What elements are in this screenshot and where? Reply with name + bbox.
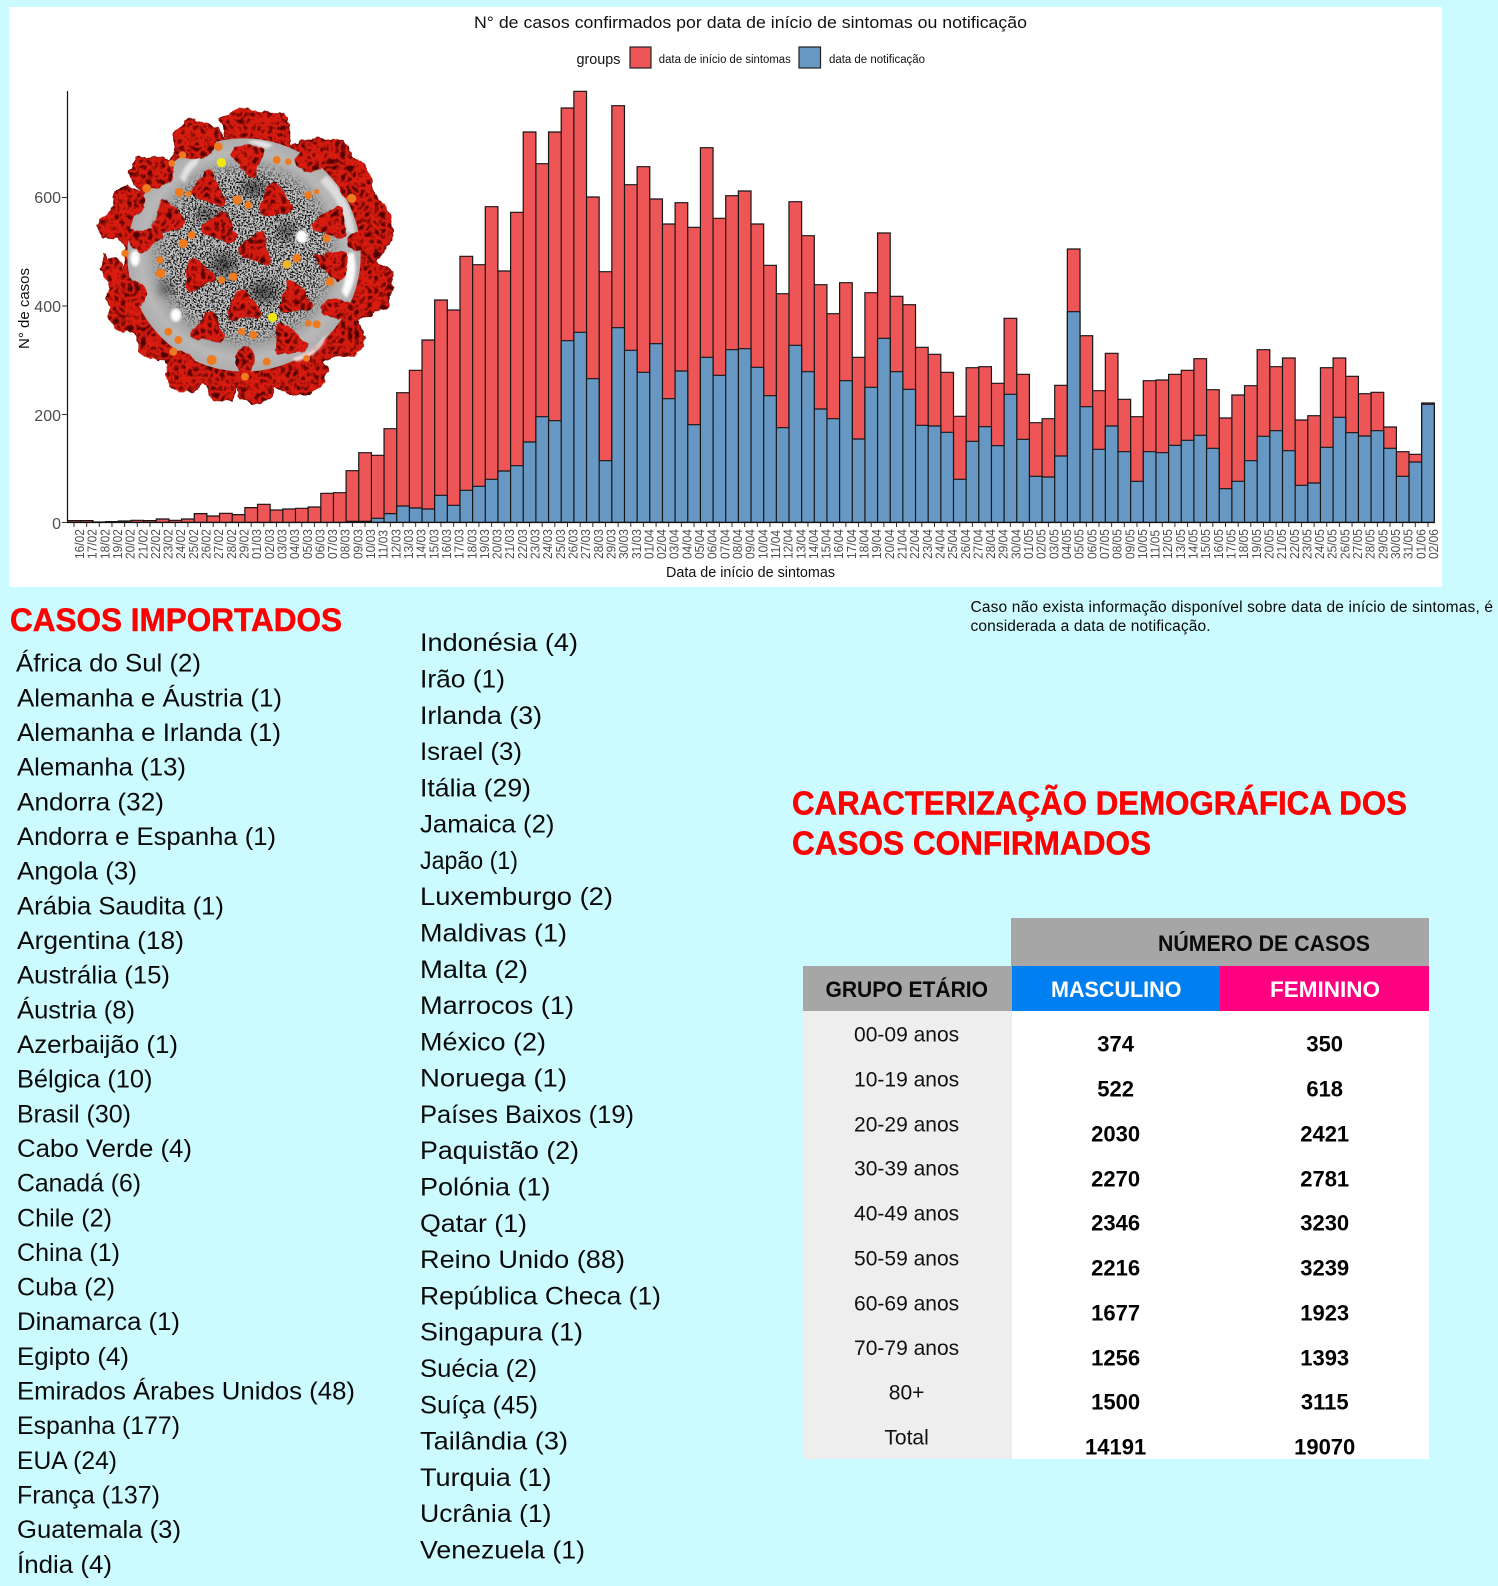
x axis date labels: 18/04 <box>857 529 872 559</box>
female case counts: 3239 <box>1300 1256 1349 1281</box>
female case counts <box>1294 1032 1355 1460</box>
x axis date labels: 02/05 <box>1034 529 1049 559</box>
x axis date labels: 23/03 <box>528 529 543 559</box>
x axis date labels: 29/05 <box>1376 529 1391 559</box>
chart title: N° de casos confirmados por data de início de sintomas ou notificação <box>474 13 1027 32</box>
header: feminino <box>1220 966 1429 1011</box>
country list: column 2: Polónia (1) <box>420 1174 550 1202</box>
age group labels: Total <box>884 1426 929 1449</box>
country list: column 1: Alemanha (13) <box>17 754 186 782</box>
bars: data de início de sintomas <box>68 91 1434 522</box>
heading: caracterização demográfica: CASOS CONFIRMADOS <box>792 824 1151 862</box>
stacked bar chart <box>62 91 1435 525</box>
x axis date labels: 10/05 <box>1135 529 1150 559</box>
x axis date labels: 31/03 <box>629 529 644 559</box>
country list: column 1: Cabo Verde (4) <box>17 1135 192 1163</box>
x axis date labels: 08/05 <box>1110 529 1125 559</box>
x axis date labels: 30/04 <box>1009 529 1024 559</box>
female case counts: 1923 <box>1300 1301 1349 1326</box>
x axis date labels: 09/04 <box>743 529 758 559</box>
country list: column 1: África do Sul (2) <box>16 649 201 678</box>
country list: column 2: Tailândia (3) <box>420 1428 568 1456</box>
male case counts: 374 <box>1097 1032 1135 1057</box>
note: considerada a data de notificação. <box>970 618 1210 635</box>
male case counts: 1677 <box>1091 1301 1140 1326</box>
x axis date labels: 08/03 <box>338 529 353 559</box>
x axis date labels: 17/04 <box>844 529 859 559</box>
x axis date labels: 14/04 <box>806 529 821 559</box>
x axis date labels: 04/04 <box>680 529 695 559</box>
x axis date labels: 22/04 <box>908 529 922 559</box>
age group labels: 80+ <box>889 1381 924 1404</box>
x axis date labels: 09/03 <box>351 529 366 559</box>
x axis date labels: 14/05 <box>1186 529 1201 559</box>
x axis date labels: 28/02 <box>224 529 239 559</box>
country list: column 2: Japão (1) <box>420 847 518 875</box>
x axis date labels: 26/04 <box>958 529 973 559</box>
x axis date labels: 13/05 <box>1173 529 1188 559</box>
country list: column 2: Maldivas (1) <box>420 920 567 948</box>
country list: column 1: Cuba (2) <box>17 1274 115 1302</box>
x axis date labels: 26/02 <box>199 529 214 559</box>
age group labels: 50-59 anos <box>854 1248 959 1271</box>
male case counts: 2346 <box>1091 1211 1140 1236</box>
female case counts: 19070 <box>1294 1435 1355 1460</box>
heading: caracterização demográfica: CARACTERIZAÇÃO DEMOGRÁFICA DOS <box>792 784 1407 822</box>
x axis date labels: 06/05 <box>1085 529 1099 559</box>
male case counts: 14191 <box>1085 1435 1146 1460</box>
female case counts: 1393 <box>1300 1345 1349 1370</box>
x axis date labels: 30/05 <box>1389 529 1403 559</box>
x axis date labels: 29/04 <box>996 529 1011 559</box>
country list: column 2: Malta (2) <box>420 956 528 984</box>
x axis date labels: 01/03 <box>250 529 264 559</box>
country list: column 1: Emirados Árabes Unidos (48) <box>17 1377 355 1406</box>
x axis date labels: 19/04 <box>870 529 884 559</box>
header: número de casos: NÚMERO DE CASOS <box>1158 931 1370 956</box>
y axis labels: 200 <box>34 408 61 425</box>
y axis title: N° de casos <box>17 268 33 349</box>
legend: data de notificação <box>829 54 925 66</box>
x axis date labels: 12/04 <box>781 529 796 559</box>
x axis date labels: 25/03 <box>553 529 568 559</box>
x axis date labels: 24/02 <box>174 529 188 559</box>
age group labels: 60-69 anos <box>854 1293 959 1316</box>
x axis date labels: 03/03 <box>275 529 290 559</box>
x axis date labels: 24/05 <box>1313 529 1327 559</box>
country list: column 1 <box>16 649 355 1579</box>
icon: coronavirus illustration <box>97 108 393 404</box>
x axis date labels: 23/02 <box>161 529 176 559</box>
x axis date labels: 30/03 <box>617 529 631 559</box>
country list: column 1: Dinamarca (1) <box>17 1308 180 1336</box>
x axis date labels: 22/03 <box>515 529 530 559</box>
x axis date labels: 31/05 <box>1401 529 1416 559</box>
country list: column 1: Áustria (8) <box>17 995 135 1024</box>
x axis date labels: 24/04 <box>933 529 948 559</box>
x axis date labels: 06/04 <box>705 529 720 559</box>
x axis date labels: 14/03 <box>414 529 429 559</box>
x axis date labels: 09/05 <box>1123 529 1137 559</box>
male case counts: 2216 <box>1091 1256 1140 1281</box>
male case counts: 522 <box>1097 1077 1134 1102</box>
x axis date labels: 21/02 <box>136 529 150 559</box>
legend <box>576 47 925 68</box>
male case counts: 2270 <box>1091 1167 1140 1192</box>
country list: column 2 <box>420 629 661 1564</box>
x axis date labels: 24/03 <box>541 529 555 559</box>
x axis date labels: 16/04 <box>832 529 846 559</box>
x axis date labels: 28/04 <box>984 529 998 559</box>
country list: column 1: Bélgica (10) <box>17 1066 152 1094</box>
header: grupo etário <box>803 966 1012 1011</box>
x axis date labels: 15/03 <box>427 529 441 559</box>
country list: column 2: Suíça (45) <box>420 1391 538 1419</box>
x axis date labels: 19/05 <box>1249 529 1264 559</box>
country list: column 1: Egipto (4) <box>17 1343 129 1371</box>
x axis date labels: 05/05 <box>1072 529 1087 559</box>
country list: column 2: Países Baixos (19) <box>420 1101 634 1129</box>
header: número de casos <box>1011 918 1429 966</box>
country list: column 1: Andorra e Espanha (1) <box>17 823 276 851</box>
x axis date labels: 03/04 <box>667 529 682 559</box>
x axis date labels: 05/03 <box>300 529 315 559</box>
x axis date labels: 15/04 <box>819 529 834 559</box>
x axis date labels: 16/03 <box>440 529 454 559</box>
panel: chart <box>9 7 1442 587</box>
country list: column 2: Paquistão (2) <box>420 1137 579 1165</box>
x axis date labels: 29/03 <box>604 529 619 559</box>
country list: column 2: México (2) <box>420 1028 546 1056</box>
country list: column 1: Guatemala (3) <box>17 1516 181 1544</box>
x axis date labels: 22/02 <box>148 529 163 559</box>
x axis date labels: 01/04 <box>642 529 657 559</box>
legend: groups <box>576 51 620 68</box>
x axis date labels: 07/05 <box>1098 529 1112 559</box>
country list: column 2: República Checa (1) <box>420 1282 661 1310</box>
x axis date labels: 19/03 <box>477 529 492 559</box>
x axis date labels: 27/04 <box>971 529 986 559</box>
x axis date labels: 28/05 <box>1363 529 1378 559</box>
x axis date labels: 28/03 <box>591 529 606 559</box>
y axis labels: 0 <box>52 516 61 533</box>
x axis date labels: 07/03 <box>326 529 340 559</box>
bars: data de notificação <box>346 312 1434 522</box>
heading: caracterização demográfica <box>792 784 1407 862</box>
x axis date labels: 02/06 <box>1427 529 1441 559</box>
female case counts: 3230 <box>1300 1211 1349 1236</box>
x axis date labels: 26/05 <box>1338 529 1353 559</box>
country list: column 2: Noruega (1) <box>420 1065 567 1093</box>
country list: column 1: Brasil (30) <box>17 1100 131 1128</box>
country list: column 1: EUA (24) <box>17 1447 117 1475</box>
x axis date labels: 17/03 <box>452 529 467 559</box>
country list: column 2: Itália (29) <box>420 774 531 802</box>
country list: column 2: Turquia (1) <box>420 1464 552 1492</box>
country list: column 2: Israel (3) <box>420 738 522 766</box>
country list: column 1: China (1) <box>17 1239 120 1267</box>
x axis date labels: 25/02 <box>186 529 201 559</box>
country list: column 2: Marrocos (1) <box>420 992 574 1020</box>
country list: column 1: Angola (3) <box>17 858 137 886</box>
country list: column 2: Indonésia (4) <box>420 629 578 657</box>
y axis labels: 600 <box>34 190 61 207</box>
country list: column 2: Venezuela (1) <box>420 1536 585 1564</box>
age group labels: 10-19 anos <box>854 1069 959 1092</box>
x axis date labels: 01/05 <box>1022 529 1036 559</box>
female case counts: 618 <box>1306 1077 1343 1102</box>
x axis date labels: 18/02 <box>98 529 112 559</box>
x axis date labels: 27/02 <box>212 529 226 559</box>
x axis date labels: 16/05 <box>1211 529 1226 559</box>
x axis date labels: 04/05 <box>1060 529 1074 559</box>
x axis date labels: 20/03 <box>490 529 505 559</box>
x axis date labels: 07/04 <box>718 529 733 559</box>
x axis date labels: 22/05 <box>1287 529 1302 559</box>
x axis date labels: 18/05 <box>1237 529 1251 559</box>
header: feminino: FEMININO <box>1270 977 1380 1002</box>
x axis date labels: 03/05 <box>1047 529 1062 559</box>
x axis date labels: 23/04 <box>920 529 935 559</box>
country list: column 1: Chile (2) <box>17 1204 112 1232</box>
header: grupo etário: GRUPO ETÁRIO <box>826 977 988 1002</box>
country list: column 2: Irão (1) <box>420 666 505 694</box>
country list: column 1: Índia (4) <box>17 1550 112 1579</box>
female case counts: 2421 <box>1300 1122 1349 1147</box>
x axis date labels: 26/03 <box>566 529 581 559</box>
male case counts <box>1085 1032 1146 1460</box>
x axis date labels: 04/03 <box>288 529 302 559</box>
male case counts: 1256 <box>1091 1345 1140 1370</box>
country list: column 1: Canadá (6) <box>17 1170 141 1198</box>
legend: data de início de sintomas <box>659 54 791 66</box>
x axis date labels: 20/04 <box>882 529 897 559</box>
x axis date labels: 21/04 <box>895 529 910 559</box>
x axis date labels: 15/05 <box>1199 529 1213 559</box>
age group labels <box>854 1024 959 1449</box>
x axis date labels: 23/05 <box>1300 529 1315 559</box>
panel: imported cases <box>10 602 661 1579</box>
x axis date labels: 08/04 <box>731 529 745 559</box>
y axis labels <box>34 190 61 533</box>
x axis date labels: 20/02 <box>123 529 138 559</box>
x axis date labels: 02/03 <box>262 529 277 559</box>
x axis date labels: 12/05 <box>1161 529 1175 559</box>
x axis date labels <box>73 529 1441 559</box>
x axis date labels: 21/03 <box>503 529 517 559</box>
x axis date labels: 11/03 <box>376 530 391 559</box>
country list: column 2: Singapura (1) <box>420 1319 583 1347</box>
country list: column 2: Luxemburgo (2) <box>420 883 613 911</box>
country list: column 2: Irlanda (3) <box>420 702 542 730</box>
demographic table <box>803 918 1429 1460</box>
x axis date labels: 27/03 <box>579 529 593 559</box>
age group labels: 40-49 anos <box>854 1203 959 1226</box>
x axis date labels: 05/04 <box>693 529 707 559</box>
country list: column 1: Arábia Saudita (1) <box>17 892 224 920</box>
x axis date labels: 29/02 <box>237 529 252 559</box>
age group labels: 20-29 anos <box>854 1114 959 1137</box>
x axis date labels: 01/06 <box>1414 529 1428 559</box>
country list: column 1: Argentina (18) <box>17 927 184 955</box>
x axis date labels: 10/04 <box>756 529 770 559</box>
x axis date labels: 18/03 <box>465 529 479 559</box>
country list: column 2: Suécia (2) <box>420 1355 537 1383</box>
female case counts: 3115 <box>1301 1390 1349 1415</box>
x axis date labels: 02/04 <box>655 529 669 559</box>
country list: column 1: França (137) <box>17 1482 160 1510</box>
country list: column 2: Ucrânia (1) <box>420 1500 552 1528</box>
age group labels: 30-39 anos <box>854 1158 959 1181</box>
country list: column 2: Reino Unido (88) <box>420 1246 625 1274</box>
note: Caso não exista informação disponível sobre data de início de sintomas, é <box>970 599 1493 616</box>
header: masculino <box>1012 966 1220 1011</box>
x axis date labels: 21/05 <box>1275 529 1289 559</box>
female case counts: 350 <box>1306 1032 1343 1057</box>
x axis date labels: 20/05 <box>1262 529 1277 559</box>
heading: casos importados: CASOS IMPORTADOS <box>10 602 342 638</box>
x axis date labels: 27/05 <box>1351 529 1365 559</box>
x axis date labels: 11/04 <box>769 530 783 559</box>
country list: column 2: Qatar (1) <box>420 1210 527 1238</box>
country list: column 1: Alemanha e Irlanda (1) <box>17 719 281 747</box>
male case counts: 2030 <box>1091 1122 1140 1147</box>
x axis date labels: 17/05 <box>1224 529 1239 559</box>
country list: column 1: Espanha (177) <box>17 1412 180 1440</box>
country list: column 2: Jamaica (2) <box>420 811 554 839</box>
x axis date labels: 17/02 <box>85 529 100 559</box>
note <box>970 599 1493 635</box>
country list: column 1: Alemanha e Áustria (1) <box>17 683 282 712</box>
age group labels: 00-09 anos <box>854 1024 959 1047</box>
x axis date labels: 16/02 <box>73 529 87 559</box>
x axis date labels: 13/04 <box>794 529 808 559</box>
x axis date labels: 25/04 <box>946 529 960 559</box>
header: masculino: MASCULINO <box>1051 977 1182 1002</box>
x axis date labels: 06/03 <box>313 529 328 559</box>
x axis date labels: 25/05 <box>1325 529 1340 559</box>
x axis date labels: 13/03 <box>402 529 416 559</box>
x axis date labels: 19/02 <box>111 529 125 559</box>
country list: column 1: Austrália (15) <box>17 962 170 990</box>
x axis title: Data de início de sintomas <box>666 564 835 581</box>
x axis date labels: 10/03 <box>364 529 378 559</box>
y axis labels: 400 <box>34 299 61 316</box>
country list: column 1: Andorra (32) <box>17 788 164 816</box>
country list: column 1: Azerbaijão (1) <box>17 1031 178 1059</box>
female case counts: 2781 <box>1300 1167 1349 1192</box>
x axis date labels: 11/05 <box>1148 530 1163 559</box>
x axis date labels: 12/03 <box>389 529 404 559</box>
male case counts: 1500 <box>1091 1390 1140 1415</box>
age group labels: 70-79 anos <box>854 1337 959 1360</box>
